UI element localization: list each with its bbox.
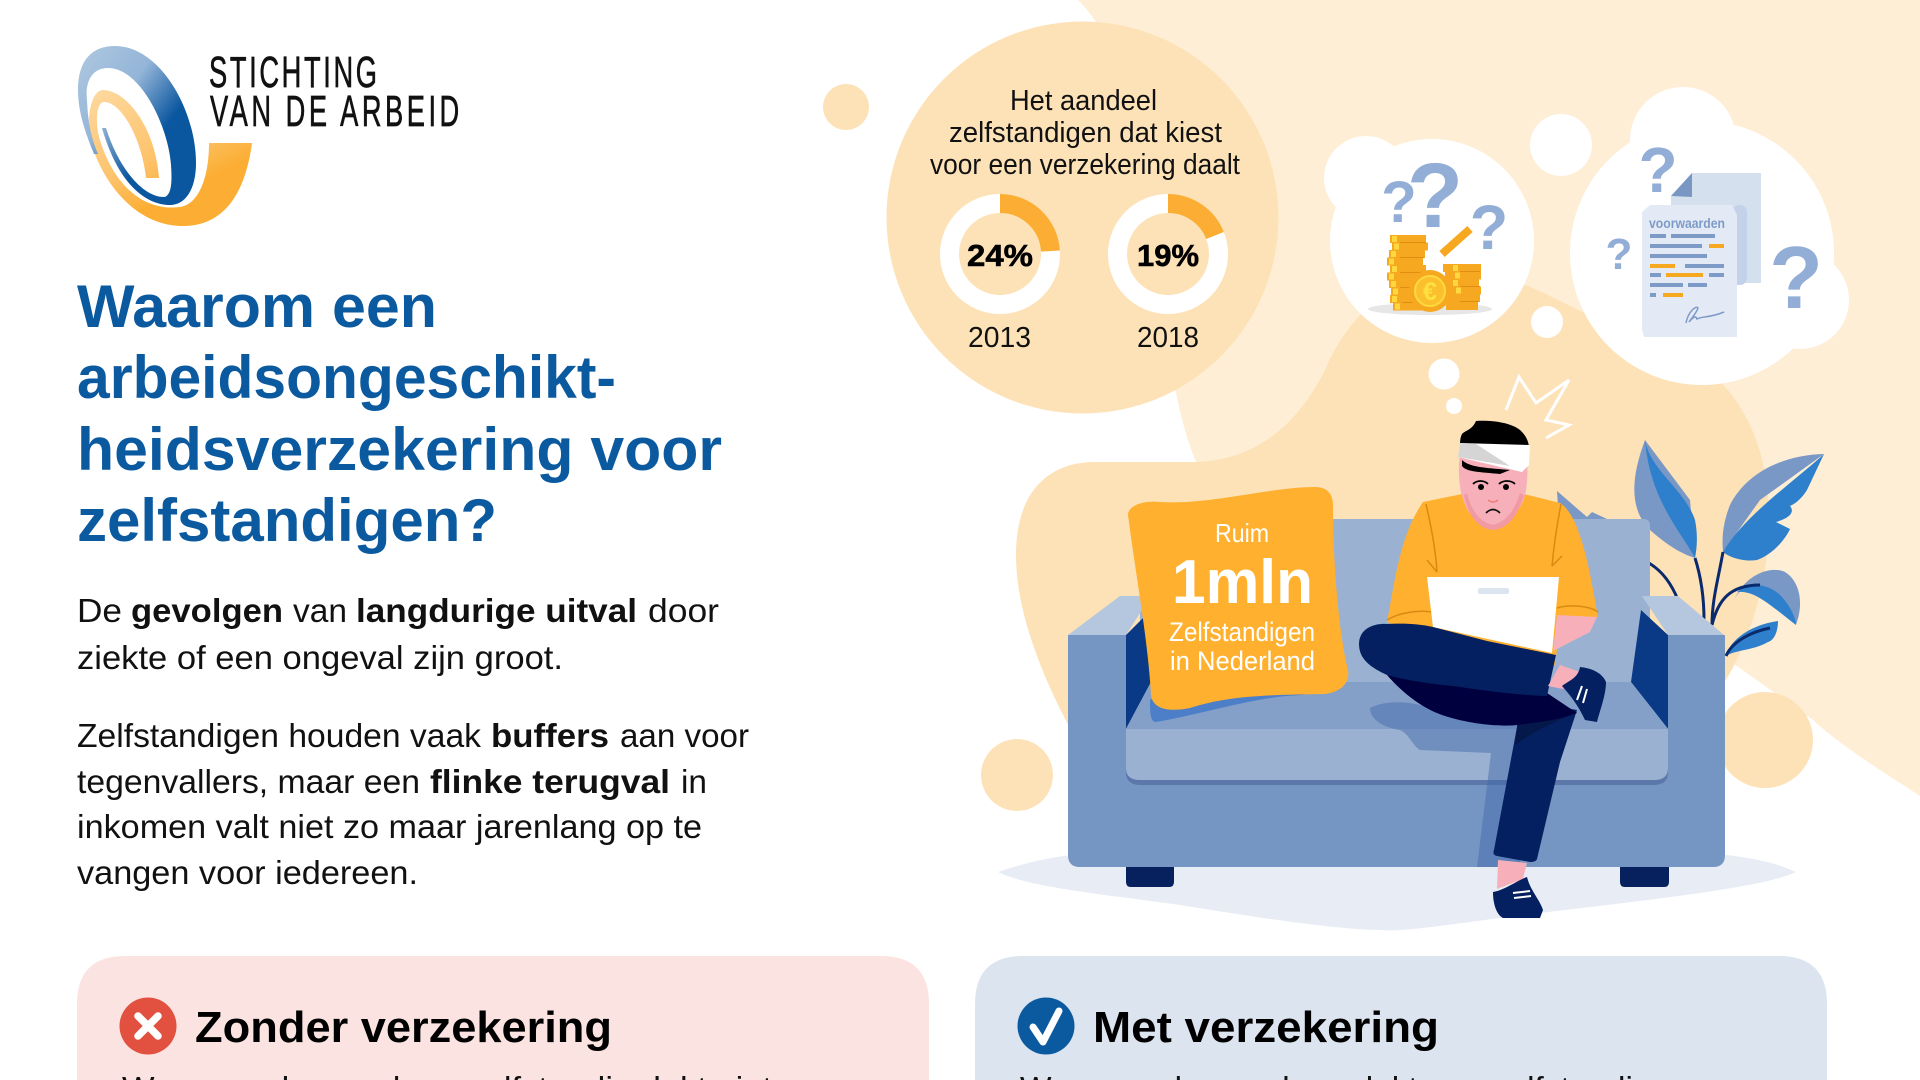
year labels: 2013: [968, 322, 1031, 354]
sitting shadow: [1370, 702, 1520, 867]
icon: question marks: ?: [1606, 230, 1632, 279]
thigh underside: [1387, 675, 1577, 726]
laptop: [1427, 577, 1559, 653]
donut 2018: 19%: [1118, 204, 1218, 304]
raised shoe: [1562, 667, 1606, 722]
stems: [1647, 552, 1770, 656]
icon: coins: €: [1423, 278, 1437, 306]
leaf: [1645, 440, 1697, 558]
decorative circle left of sofa: [981, 739, 1053, 811]
title: [77, 273, 722, 554]
statistics circle: [886, 22, 1278, 414]
shoe on floor: [1493, 877, 1543, 918]
donut 2018: 19%: 19%: [1137, 238, 1199, 273]
intro paragraph 2: [77, 717, 749, 891]
right arm: [1553, 615, 1597, 651]
icon: check: [1018, 998, 1074, 1054]
icon: question marks: ?: [1381, 170, 1417, 235]
ankle: [1548, 665, 1580, 689]
sofa: [1068, 519, 1725, 887]
head: [1459, 452, 1527, 525]
title: Waarom een: [77, 273, 437, 340]
title: heidsverzekering voor: [77, 416, 722, 483]
intro paragraph 1: ziekte of een ongeval zijn groot.: [77, 639, 563, 676]
title: arbeidsongeschikt-: [77, 344, 616, 411]
donut 2013: 24%: [950, 204, 1050, 304]
pillow text: in Nederland: [1170, 646, 1315, 676]
leaf: [1734, 570, 1800, 625]
shirt creases: [1387, 504, 1598, 620]
intro paragraph 1: langdurige uitval: [356, 592, 637, 629]
leaf tips behind sofa: [1557, 491, 1607, 540]
sofa seat top: [1126, 682, 1668, 729]
shirt: [1387, 493, 1598, 665]
intro paragraph 1: gevolgen: [131, 592, 283, 629]
intro paragraph 2: buffers: [491, 717, 609, 754]
leaf: [1634, 440, 1695, 558]
thought bubbles: [1428, 114, 1592, 414]
intro paragraph 2: flinke terugval: [430, 763, 670, 800]
intro paragraph 2: tegenvallers, maar een: [77, 763, 420, 800]
donut 2013: 24%: 24%: [967, 238, 1033, 273]
intro paragraph 2: Zelfstandigen houden vaak: [77, 717, 482, 754]
raised thigh: [1359, 624, 1556, 696]
year labels: 2018: [1137, 322, 1199, 354]
pillow text: Zelfstandigen: [1169, 617, 1315, 647]
pillow text: [1169, 518, 1315, 676]
lower leg: [1493, 700, 1577, 862]
intro paragraph 2: in: [681, 763, 707, 800]
logo swirl: [78, 46, 252, 226]
panel: met verzekering: [975, 956, 1827, 1080]
pillow callout: [1128, 487, 1348, 722]
floor shadow: [998, 852, 1796, 930]
heading: Met verzekering: [1093, 1003, 1439, 1052]
icon: question marks: [1381, 145, 1508, 263]
decorative circle right of sofa: [1717, 692, 1813, 788]
intro paragraph 2: aan voor: [620, 717, 749, 754]
logo wordmark: STICHTING: [209, 47, 377, 97]
leg shade: [1515, 700, 1577, 745]
intro paragraph 2: vangen voor iedereen.: [77, 854, 418, 891]
thought cloud: money: [1324, 114, 1592, 414]
intro paragraph 1: [77, 592, 719, 676]
icon: question marks: ?: [1470, 193, 1508, 263]
statistics heading: [930, 85, 1240, 181]
sofa body: [1068, 635, 1725, 867]
intro paragraph 1: door: [648, 592, 719, 629]
heading: Zonder verzekering: [195, 1003, 612, 1052]
face: [1473, 481, 1515, 513]
thought cloud: conditions: [1570, 87, 1849, 385]
icon: cross: [120, 998, 176, 1054]
plant: [1557, 440, 1824, 656]
title: zelfstandigen?: [77, 487, 497, 554]
sofa inner sides: [1126, 610, 1668, 729]
icon: question marks: ?: [1638, 134, 1678, 206]
icon: document: [1642, 173, 1761, 337]
leaf: [1723, 454, 1824, 552]
icon: coins: [1368, 229, 1492, 315]
sofa back: [1140, 519, 1650, 719]
leaf: [1726, 621, 1778, 656]
pillow shadow: [1150, 690, 1305, 722]
sofa arm tops: [1068, 596, 1724, 635]
pillow text: Ruim: [1215, 518, 1269, 548]
icon: headache lightning: [1506, 377, 1569, 438]
bandage: [1458, 443, 1530, 472]
leaf: [1737, 585, 1796, 625]
intro paragraph 2: inkomen valt niet zo maar jarenlang op te: [77, 808, 702, 845]
intro paragraph 1: De: [77, 592, 122, 629]
panel: zonder verzekering: [77, 956, 929, 1080]
decorative circle top: [823, 84, 869, 130]
sofa feet: [1126, 867, 1669, 887]
background: mid blob: [1016, 272, 1769, 780]
logo wordmark: VAN DE ARBEID: [210, 86, 459, 136]
sofa cushion: [1126, 729, 1668, 785]
background: pale blob: [1078, 0, 1920, 796]
statistics heading: Het aandeel: [1010, 85, 1157, 117]
statistics heading: voor een verzekering daalt: [930, 149, 1240, 181]
pillow shape: [1128, 487, 1348, 710]
man on sofa: [1359, 421, 1606, 918]
logo: [78, 46, 459, 226]
neck shadow: [1464, 493, 1524, 530]
icon: document: voorwaarden: [1649, 216, 1725, 231]
leaf: [1723, 454, 1824, 561]
icon: question marks: [1606, 134, 1823, 327]
shin: [1497, 860, 1527, 889]
statistics heading: zelfstandigen dat kiest: [949, 117, 1222, 149]
hair: [1460, 421, 1529, 474]
year labels: [968, 322, 1199, 354]
icon: question marks: ?: [1407, 145, 1463, 247]
logo wordmark: [209, 47, 459, 136]
pillow text: 1mln: [1172, 548, 1313, 617]
intro paragraph 1: van: [293, 592, 347, 629]
icon: question marks: ?: [1769, 228, 1823, 327]
